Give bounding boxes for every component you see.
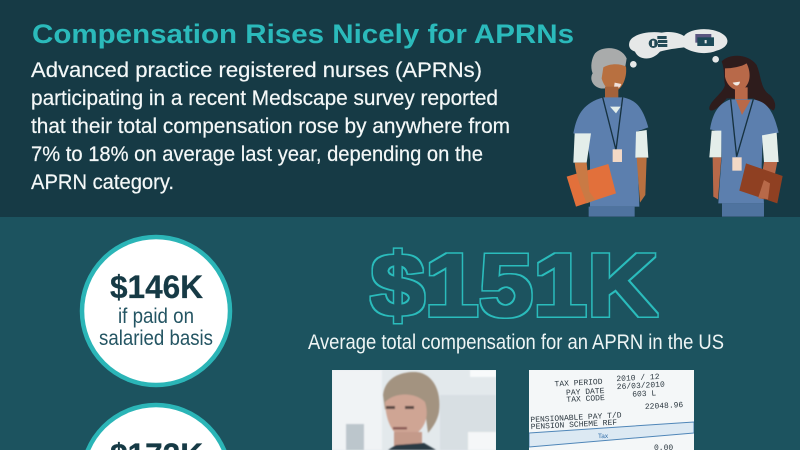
icon: thought bubble	[629, 29, 727, 68]
panel: header background	[0, 0, 800, 217]
stat circle: salaried	[82, 237, 230, 385]
photo: pay stub: 26/03/2010	[617, 381, 665, 392]
salaried label	[99, 305, 213, 350]
photo: pay stub: 22048.96	[645, 401, 684, 412]
intro text block: APRN category.	[31, 171, 174, 194]
photo: pay stub: TAX PERIOD	[554, 378, 603, 389]
nurse right	[709, 56, 783, 217]
photo: pay stub	[528, 370, 694, 450]
photo: pay stub: 603 L	[632, 389, 657, 400]
illustration: two nurses with thought bubbles	[567, 29, 783, 217]
intro text block: that their total compensation rose by anywhere from	[31, 115, 510, 138]
photo: pay stub: PAY DATE	[566, 387, 605, 398]
salaried label: if paid on	[118, 305, 194, 328]
nurse left	[567, 48, 648, 217]
photo: pay stub: 2010 / 12	[616, 373, 660, 384]
title: Compensation Rises Nicely for APRNs	[32, 19, 574, 49]
stat circle: second pay basis, cut off by the canvas edge	[82, 405, 230, 450]
photo: pay stub: Tax	[598, 433, 609, 440]
photo: nurse portrait	[332, 370, 496, 450]
intro text block: 7% to 18% on average last year, depending on the	[31, 143, 483, 166]
intro text block: Advanced practice registered nurses (APRNs)	[31, 59, 482, 82]
intro text block: participating in a recent Medscape survey reported	[31, 87, 498, 110]
big outlined figure: $151K	[370, 236, 658, 334]
photo: pay stub: PENSION SCHEME REF	[531, 419, 618, 432]
salaried label: salaried basis	[99, 327, 213, 350]
intro text block	[31, 59, 510, 194]
panel: lower background	[0, 217, 800, 450]
photo: pay stub: TAX CODE	[566, 394, 605, 405]
subtitle: Average total compensation for an APRN in the US	[308, 331, 724, 354]
salaried amount: $146K	[110, 269, 203, 305]
photo: pay stub: PENSIONABLE PAY T/D	[530, 411, 622, 425]
